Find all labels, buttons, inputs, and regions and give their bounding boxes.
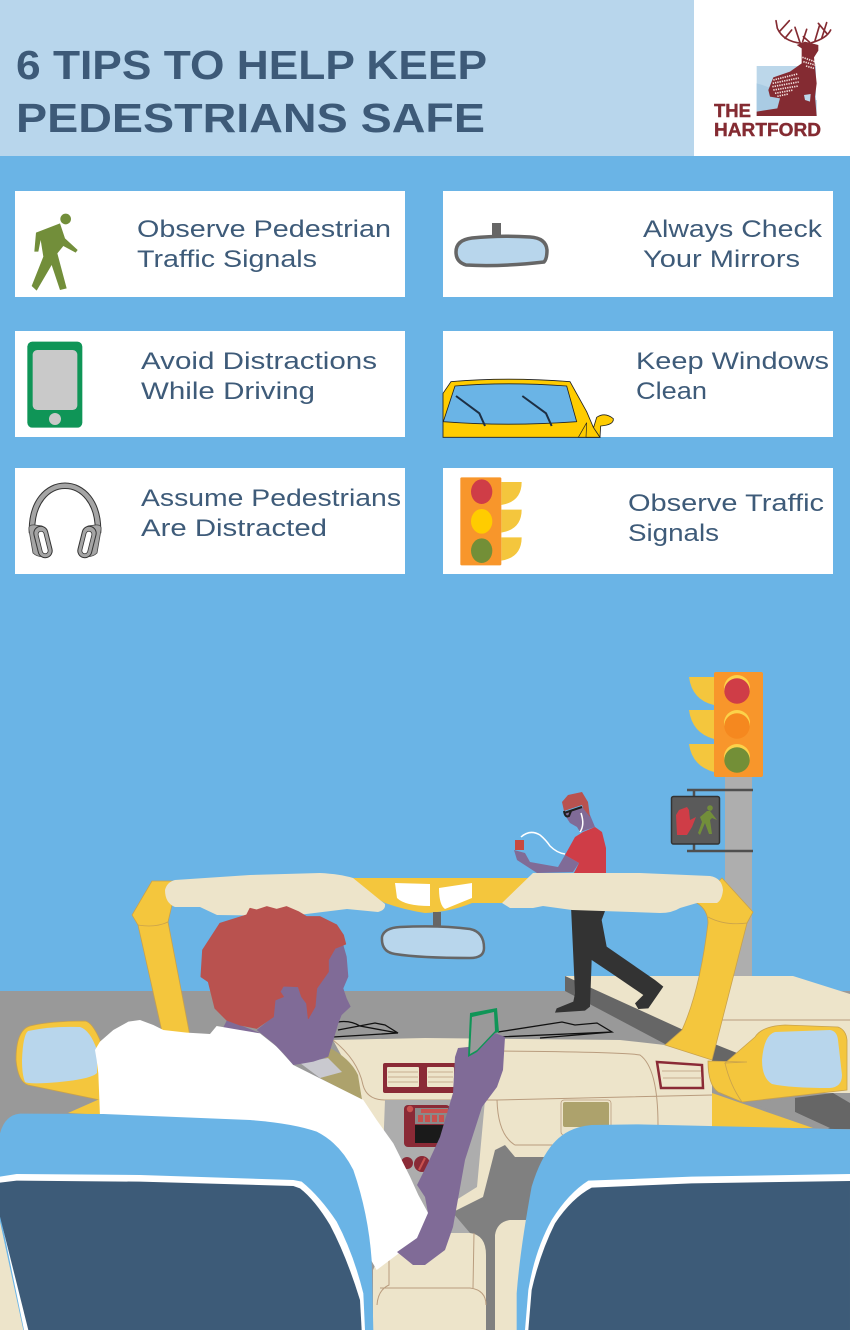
card: assume pedestrians are distracted: Assume Pedestrians: [141, 485, 401, 512]
card: observe pedestrian traffic signals: Traffic Signals: [137, 246, 317, 273]
passenger seat base: [495, 1220, 530, 1330]
radio: [401, 1105, 450, 1172]
card: observe traffic signals: [443, 468, 833, 574]
card: avoid distractions: Avoid Distractions: [141, 348, 377, 375]
phone in hand: [468, 1008, 499, 1057]
footwell: [375, 1145, 560, 1330]
icon: headphones: [29, 486, 101, 559]
glove box vent: [563, 1102, 609, 1127]
rear view mirror: [382, 912, 484, 958]
center console bottom: [373, 1233, 486, 1330]
arm: [514, 850, 579, 873]
left seat: [0, 1114, 373, 1330]
title: PEDESTRIANS SAFE: [16, 95, 485, 141]
neck: [222, 1020, 260, 1034]
icon: rear view mirror: [456, 223, 547, 266]
right seat: [517, 1124, 850, 1330]
card: always check your mirrors: [443, 191, 833, 297]
dashboard: [333, 1038, 712, 1233]
right wing mirror: [708, 1025, 847, 1128]
card: assume pedestrians are distracted: Are Distracted: [141, 515, 327, 542]
face: [257, 945, 351, 1065]
card: observe pedestrian traffic signals: [15, 191, 405, 297]
glasses: [564, 807, 582, 816]
card: observe pedestrian traffic signals: Observe Pedestrian: [137, 216, 391, 243]
left sun visor: [165, 873, 385, 916]
roof header: [340, 878, 540, 913]
icon: traffic light: [460, 477, 522, 565]
driver collar: [300, 1058, 342, 1078]
icon: walking pedestrian: [32, 214, 78, 291]
left pillar: [132, 881, 190, 1036]
card: assume pedestrians are distracted: [15, 468, 405, 574]
card: observe traffic signals: Observe Traffic: [628, 490, 824, 517]
sidewalk: [565, 976, 850, 1093]
left wing mirror: [16, 1021, 104, 1115]
card: keep windows clean: [443, 331, 833, 437]
earphone wire: [521, 813, 583, 854]
pedestrian crossing signal: [672, 790, 753, 851]
logo wordmark: [714, 100, 821, 140]
logo: The Hartford: [694, 0, 850, 156]
arm holding phone: [397, 1033, 505, 1265]
sun visor cut-outs: [395, 883, 472, 909]
logo wordmark: HARTFORD: [714, 119, 821, 140]
white shirt: [95, 1020, 428, 1270]
phone: [515, 840, 524, 850]
logo wordmark: THE: [714, 100, 751, 121]
hair: [201, 907, 346, 1028]
driver seat headrest: [320, 1047, 362, 1100]
right sun visor: [502, 873, 723, 913]
road: [0, 991, 850, 1330]
pedestrian with phone and earphones: [514, 792, 663, 1013]
right pillar: [665, 878, 753, 1060]
hair: [562, 792, 590, 817]
title: [16, 42, 487, 141]
card: avoid distractions: [15, 331, 405, 437]
icon: smartphone: [27, 342, 82, 428]
card: avoid distractions: While Driving: [141, 378, 315, 405]
card: keep windows clean: Clean: [636, 378, 707, 405]
windshield wipers: [333, 1022, 612, 1038]
trousers: [555, 907, 663, 1013]
header band: [0, 0, 694, 156]
air vents: [383, 1062, 703, 1093]
card: always check your mirrors: Always Check: [643, 216, 823, 243]
console: [380, 1100, 485, 1233]
illustration: street and car interior: [0, 672, 850, 1330]
neck and head: [564, 807, 595, 832]
icon: yellow car: [443, 379, 613, 437]
card: always check your mirrors: Your Mirrors: [643, 246, 800, 273]
t-shirt: [565, 827, 606, 880]
curb: [565, 976, 850, 1129]
card: observe traffic signals: Signals: [628, 520, 719, 547]
large traffic light: [689, 672, 763, 777]
traffic signal pole: [725, 775, 752, 980]
title: 6 TIPS TO HELP KEEP: [16, 42, 487, 88]
card: keep windows clean: Keep Windows: [636, 348, 829, 375]
driver: [95, 907, 505, 1270]
